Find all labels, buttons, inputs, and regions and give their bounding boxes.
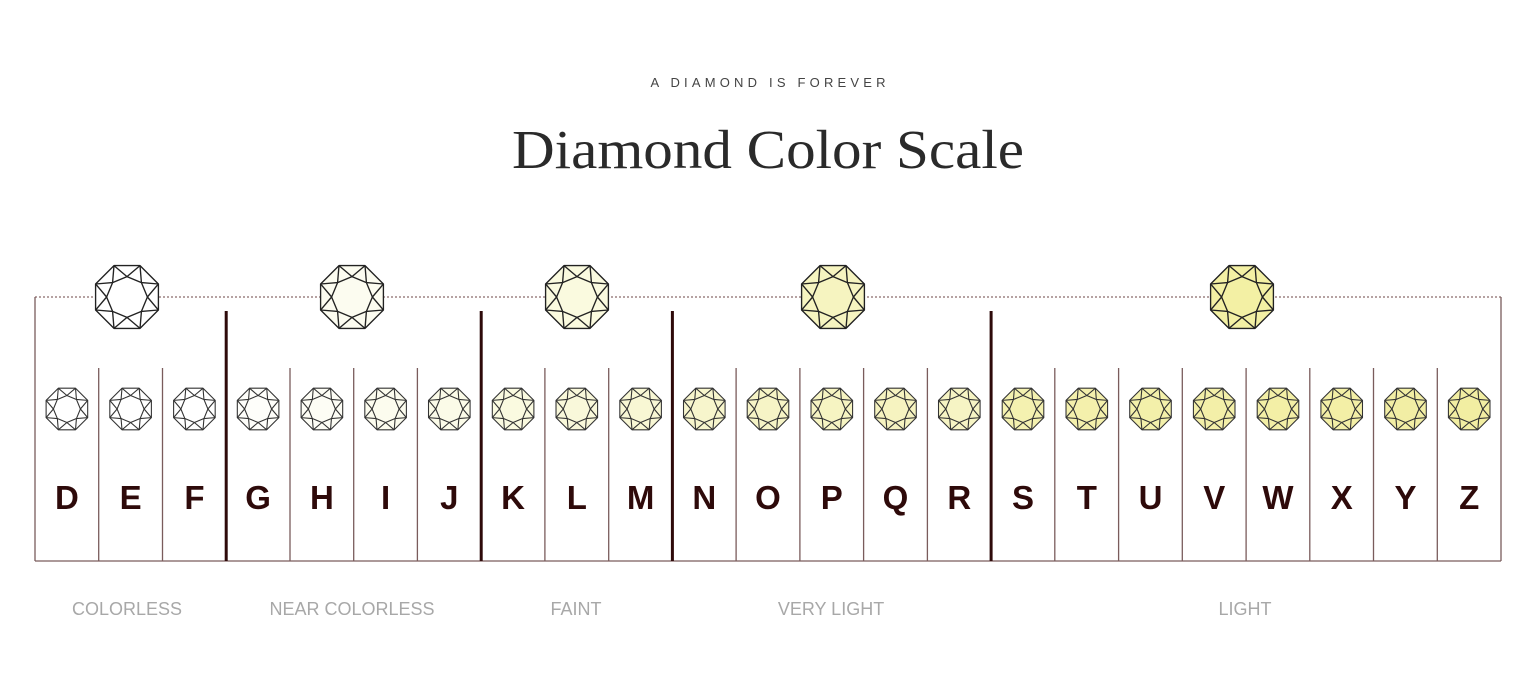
grade letters: K — [501, 479, 525, 516]
subtitle: A DIAMOND IS FOREVER — [650, 75, 886, 90]
grade letters: V — [1203, 479, 1225, 516]
group labels: COLORLESS — [72, 599, 182, 619]
grade letters: Y — [1394, 479, 1417, 516]
grade letters: T — [1077, 479, 1097, 516]
grade letters: J — [440, 479, 458, 516]
small diamonds — [46, 388, 1490, 430]
icon: large diamond colorless — [96, 266, 158, 328]
grade letters: N — [692, 479, 716, 516]
icon: large diamond near colorless — [321, 266, 383, 328]
group dividers — [226, 311, 991, 561]
grade letters: P — [821, 479, 843, 516]
grade letters: Z — [1459, 479, 1479, 516]
grade letters: E — [120, 479, 142, 516]
grade letters: Q — [883, 479, 908, 516]
grade letters: R — [947, 479, 971, 516]
group labels: FAINT — [550, 599, 602, 619]
grade letters: X — [1331, 479, 1353, 516]
grade letters: O — [755, 479, 781, 516]
grade letters: F — [184, 479, 204, 516]
grade letters: G — [245, 479, 271, 516]
grade letters: M — [627, 479, 654, 516]
grade letters: W — [1262, 479, 1294, 516]
icon: large diamond very light — [802, 266, 864, 328]
group labels: VERY LIGHT — [778, 599, 884, 619]
icon: large diamond light — [1211, 266, 1273, 328]
group labels — [72, 599, 1272, 619]
grade letters: S — [1012, 479, 1034, 516]
group labels: LIGHT — [1218, 599, 1272, 619]
grade letters: L — [567, 479, 587, 516]
large diamonds — [96, 266, 1273, 328]
grade letters — [55, 479, 1479, 516]
group labels: NEAR COLORLESS — [269, 599, 435, 619]
grade letters: H — [310, 479, 334, 516]
grade letters: U — [1139, 479, 1162, 516]
icon: large diamond faint — [546, 266, 608, 328]
grade letters: I — [381, 479, 390, 516]
grade letters: D — [55, 479, 79, 516]
scale frame — [35, 297, 1501, 561]
title: Diamond Color Scale — [512, 119, 1024, 180]
